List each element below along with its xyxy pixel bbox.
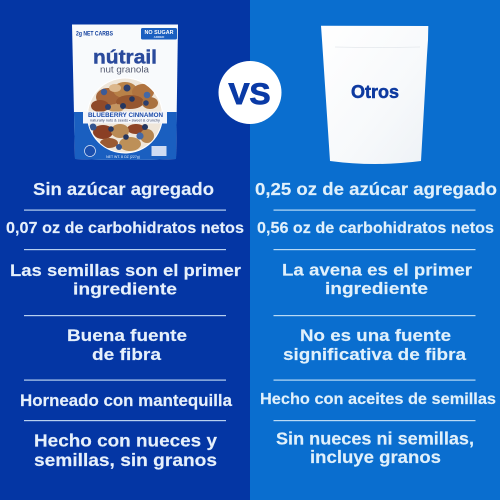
claim: oats first ingredient: La avena es el primer xyxy=(282,260,472,280)
flavor banner xyxy=(83,112,167,124)
icon: VS badge xyxy=(218,61,282,124)
claim: oats first ingredient xyxy=(282,260,472,298)
no sugar badge: NO SUGAR xyxy=(144,30,174,36)
claim: net carbs: 0,07 oz de carbohidratos netos xyxy=(6,220,244,237)
icon: VS badge: VS xyxy=(228,78,270,111)
recycling marks xyxy=(152,146,166,156)
panel: nutrail claims xyxy=(6,179,244,470)
claim: not a fiber source xyxy=(283,326,467,364)
claim: added sugar amount: 0,25 oz de azúcar agregado xyxy=(255,179,497,199)
icon: nutrail product bag xyxy=(70,24,180,162)
flavor banner: naturally nuts & seeds • sweet & crunchy xyxy=(90,118,160,122)
no sugar badge xyxy=(141,28,177,40)
claim: no nuts, includes grains: Sin nueces ni semillas, xyxy=(276,428,474,448)
granola photo xyxy=(87,78,163,154)
claim: not a fiber source: significativa de fibra xyxy=(283,345,467,364)
icon: white generic bag xyxy=(321,26,428,164)
no sugar badge: ADDED xyxy=(154,35,165,39)
claim: seeds first ingredient xyxy=(10,261,241,298)
claim: fiber source: Buena fuente xyxy=(67,326,187,345)
claim: no nuts, includes grains: incluye granos xyxy=(310,447,441,467)
claim: fiber source xyxy=(67,326,187,364)
panel: other brands claims xyxy=(255,179,497,467)
panel: left background xyxy=(0,0,250,500)
claim: seeds first ingredient: Las semillas son el primer xyxy=(10,261,241,280)
claim: nuts and seeds, grain free: Hecho con nueces y xyxy=(34,430,217,450)
net carbs label: 2g NET CARBS xyxy=(76,32,113,38)
bag label: Otros xyxy=(351,81,399,102)
product name: nut granola xyxy=(100,65,150,76)
claim: nuts and seeds, grain free: semillas, sin granos xyxy=(34,450,217,470)
brand name: nútrail xyxy=(93,48,157,68)
claim: oats first ingredient: ingrediente xyxy=(325,279,428,298)
claim: nuts and seeds, grain free xyxy=(34,430,217,470)
keto badge xyxy=(84,146,96,156)
claim: not a fiber source: No es una fuente xyxy=(300,326,451,345)
claim: no nuts, includes grains xyxy=(276,428,474,467)
panel: right background xyxy=(250,0,500,500)
claim: fiber source: de fibra xyxy=(92,345,162,364)
claim: seeds first ingredient: ingrediente xyxy=(73,280,177,298)
claim: no added sugar: Sin azúcar agregado xyxy=(33,179,214,199)
flavor banner: BLUEBERRY CINNAMON xyxy=(88,113,163,119)
net weight: NET WT. 8 OZ (227g) xyxy=(106,155,140,159)
claim: seed oils: Hecho con aceites de semillas xyxy=(260,391,496,408)
claim: baked with butter: Horneado con mantequilla xyxy=(20,392,233,410)
claim: net carbs amount: 0,56 oz de carbohidratos netos xyxy=(257,220,494,237)
